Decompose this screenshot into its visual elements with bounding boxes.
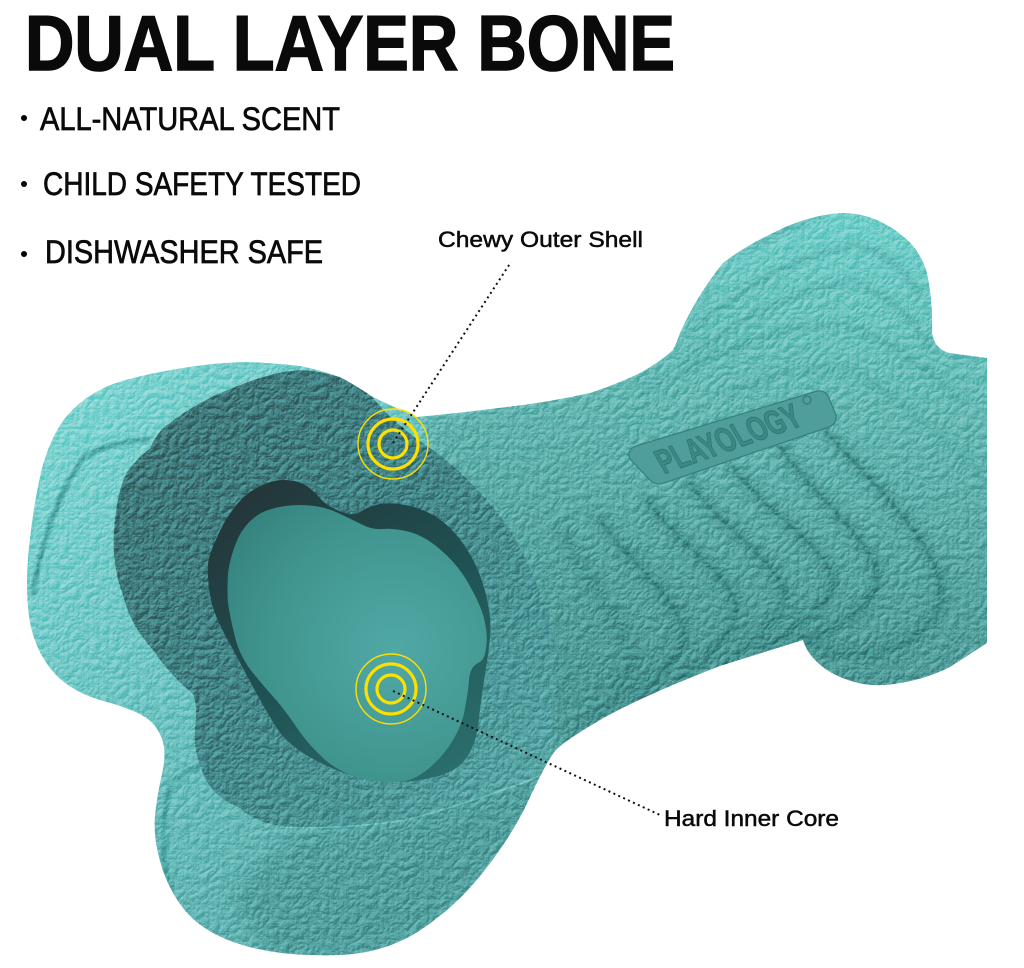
feature list (21, 101, 361, 270)
marker: hard inner core (356, 654, 426, 724)
bone body (27, 213, 886, 956)
shaft ridges (562, 433, 941, 725)
ridge shadows, soft (562, 433, 941, 725)
lower lobe crease (163, 765, 203, 895)
title: DUAL LAYER BONE (25, 0, 675, 87)
label: chewy outer shell: Chewy Outer Shell (438, 227, 643, 252)
right knob and shaft shading (420, 205, 1000, 750)
bullet: child safety tested: CHILD SAFETY TESTED (43, 166, 361, 202)
cut rim highlight (280, 776, 540, 828)
surface texture (0, 200, 1024, 968)
hard inner core (228, 505, 487, 782)
bullet: dishwasher safe: DISHWASHER SAFE (45, 234, 323, 270)
registered mark (803, 396, 811, 404)
logo text: PLAYOLOGY (648, 397, 809, 481)
upper knob ridges (640, 245, 980, 475)
lower lobe shading (232, 782, 530, 955)
cut surface (114, 370, 557, 827)
inner cavity (208, 480, 490, 782)
logo plate (629, 391, 836, 484)
label: hard inner core: Hard Inner Core (664, 806, 839, 831)
leader line: chewy outer shell (393, 262, 511, 443)
leader line: hard inner core (393, 691, 660, 815)
bullet: all-natural scent: ALL-NATURAL SCENT (40, 101, 340, 137)
ridge edges, crisp (600, 433, 941, 695)
left lobe crease (33, 439, 150, 595)
bone illustration (0, 200, 1024, 968)
marker: chewy outer shell (358, 409, 428, 479)
